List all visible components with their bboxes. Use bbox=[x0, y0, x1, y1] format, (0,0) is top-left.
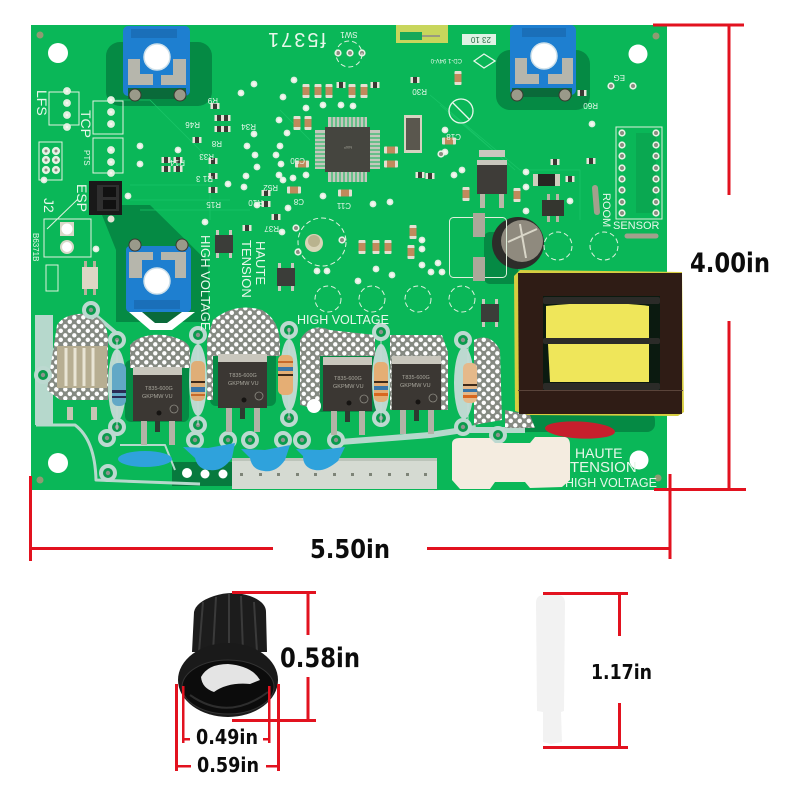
silkscreen labels: R14 bbox=[170, 158, 185, 167]
optocoupler U9 bbox=[46, 261, 98, 295]
dimension: pin length bbox=[543, 592, 628, 749]
cream power connector bbox=[452, 437, 570, 489]
J2 terminal pads bbox=[60, 222, 74, 254]
silkscreen labels: C50 bbox=[290, 156, 305, 165]
silkscreen labels: J2 bbox=[41, 198, 57, 213]
silkscreen labels: EG bbox=[613, 73, 625, 82]
switch block SW2 bbox=[616, 127, 662, 219]
tan resistor R5 bbox=[191, 340, 205, 425]
resistors bbox=[112, 328, 477, 430]
silkscreen labels: TENSION bbox=[239, 240, 254, 298]
power transistors bbox=[133, 354, 441, 445]
silkscreen labels: R60 bbox=[583, 101, 598, 110]
silkscreen labels: R8 bbox=[211, 139, 222, 148]
black ESP connector bbox=[89, 181, 122, 222]
silkscreen labels: ESP bbox=[74, 184, 90, 212]
silkscreen labels: R46 bbox=[185, 120, 200, 129]
tan resistor R3 bbox=[374, 340, 388, 425]
silkscreen labels: R15 bbox=[206, 200, 221, 209]
silkscreen labels bbox=[31, 28, 660, 490]
electrolytic capacitor bbox=[492, 217, 544, 269]
wire jumpers J3 bbox=[595, 188, 656, 236]
part marks: T835-600G bbox=[334, 376, 362, 382]
microcontroller chip bbox=[315, 117, 380, 182]
silkscreen labels: TENSION bbox=[570, 459, 637, 476]
silkscreen labels: HIGH VOLTAGE bbox=[297, 313, 389, 327]
solder mesh areas bbox=[47, 308, 535, 428]
knob height label: 0.58in bbox=[280, 643, 360, 674]
silkscreen labels: ROOM bbox=[600, 193, 612, 227]
soft shadows under tall parts bbox=[98, 42, 655, 432]
dimension: knob inner diameter bbox=[182, 686, 270, 743]
regulator Q1 bbox=[477, 150, 507, 208]
mounting holes bbox=[36, 32, 662, 484]
outer diameter label: 0.59in bbox=[197, 753, 259, 777]
lower pale trace strips bbox=[36, 315, 525, 484]
shaft pin photo bbox=[536, 595, 565, 744]
silkscreen labels: SENSOR bbox=[613, 220, 660, 232]
blue ceramic capacitors bbox=[118, 443, 345, 471]
silkscreen labels: R10 bbox=[248, 198, 263, 207]
silkscreen labels: LFS bbox=[34, 90, 50, 116]
ferrite pads and outlines near capacitor bbox=[450, 213, 506, 281]
diode D8 bbox=[533, 174, 560, 186]
silkscreen labels: 23 10 bbox=[470, 35, 491, 44]
silkscreen labels: HIGH VOLTAGE bbox=[198, 235, 213, 331]
microcontroller chip: NXP bbox=[344, 145, 352, 150]
pin length label: 1.17in bbox=[591, 660, 652, 684]
silkscreen labels: R34 bbox=[241, 122, 256, 131]
part marks: T835-600G bbox=[229, 373, 257, 379]
yellow windings bbox=[546, 303, 649, 338]
icon: blue potentiometer lower left bbox=[126, 239, 195, 330]
silkscreen labels: f5371 bbox=[266, 28, 326, 50]
yellow test strip and date label bbox=[396, 25, 496, 45]
bridge rectifier bbox=[542, 194, 564, 222]
dimension: board width bbox=[29, 474, 672, 561]
optocouplers U5 U4 U6 bbox=[215, 230, 499, 327]
tan resistor R6 bbox=[463, 340, 477, 425]
silkscreen labels: R33 bbox=[199, 152, 214, 161]
lighter trace field bbox=[105, 95, 580, 220]
silkscreen labels: C11 bbox=[336, 201, 351, 210]
small resistors and capacitors bbox=[162, 71, 596, 259]
silkscreen labels: C18 bbox=[446, 132, 461, 141]
crystal Y1 bbox=[404, 115, 422, 153]
inner diameter label: 0.49in bbox=[196, 725, 258, 749]
silkscreen labels: HAUTE bbox=[253, 241, 268, 285]
dimension: knob outer diameter bbox=[175, 684, 280, 771]
pale pad rings bbox=[34, 301, 507, 482]
tan resistor R4 bbox=[278, 328, 293, 418]
silkscreen labels: R30 bbox=[412, 87, 427, 96]
blue resistor bbox=[112, 340, 126, 430]
part marks: GKPMW VU bbox=[400, 383, 431, 389]
silkscreen labels: SW1 bbox=[340, 30, 358, 39]
part marks: T835-600G bbox=[145, 386, 173, 392]
silkscreen labels: HAUTE bbox=[575, 445, 622, 461]
bobbin bars bbox=[543, 297, 660, 390]
knob photo bbox=[178, 593, 278, 717]
dimension: knob height bbox=[232, 591, 316, 722]
silkscreen labels: R37 bbox=[264, 224, 279, 233]
height label: 4.00in bbox=[690, 248, 770, 279]
left connector footprints bbox=[39, 88, 123, 257]
part marks: GKPMW VU bbox=[333, 384, 364, 390]
part marks: T835-600G bbox=[402, 375, 430, 381]
part marks: GKPMW VU bbox=[142, 394, 173, 400]
via holes bbox=[41, 49, 637, 284]
part marks bbox=[142, 373, 431, 400]
dark pour at lower left bbox=[172, 462, 232, 486]
silkscreen labels: PTS bbox=[82, 150, 91, 166]
silkscreen labels: HIGH VOLTAGE bbox=[565, 476, 657, 490]
width label: 5.50in bbox=[310, 535, 390, 565]
silkscreen labels: R9 bbox=[207, 96, 218, 105]
silkscreen labels: C8 bbox=[293, 197, 304, 206]
white header connector bbox=[232, 458, 437, 489]
silkscreen labels: CD-1 94V-0 bbox=[430, 57, 462, 63]
part marks: GKPMW VU bbox=[228, 381, 259, 387]
red varistor bbox=[545, 420, 615, 440]
heat sink pad bbox=[57, 346, 107, 388]
icon: blue potentiometer top left bbox=[123, 26, 190, 101]
board base bbox=[31, 25, 667, 490]
transformer bbox=[514, 270, 684, 416]
silkscreen labels: R52 bbox=[263, 183, 278, 192]
pcb board bbox=[31, 25, 667, 490]
silkscreen labels: B6371B bbox=[31, 233, 40, 261]
dimension: board height bbox=[653, 24, 746, 491]
icon: blue potentiometer top right bbox=[510, 25, 576, 101]
RoHS mark and safety diamond bbox=[449, 54, 495, 123]
dashed footprint circles bbox=[298, 41, 618, 312]
silkscreen labels: R1 3 bbox=[196, 174, 213, 183]
silkscreen labels: TCP bbox=[78, 110, 94, 138]
